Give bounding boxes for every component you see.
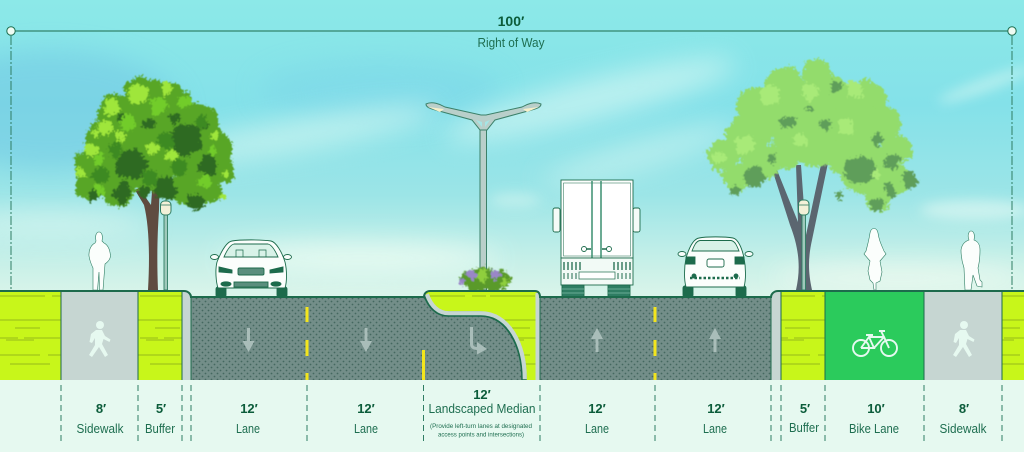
icon: left pedestrian [89,321,110,357]
label: lane 3: Lane [585,421,609,436]
footer label band [0,380,1024,452]
left sidewalk [61,291,138,380]
asphalt roadway [188,297,774,380]
cyclist silhouette [864,228,886,290]
icon: right pedestrian [953,321,974,357]
label: landscaped median: 12′ [473,387,491,402]
label: lane 4: Lane [703,421,727,436]
median curb edge [426,295,524,380]
yellow lane stripes [307,307,655,380]
label: lane 1: 12′ [240,401,258,416]
left curb [182,291,191,380]
right lamp post [798,200,809,290]
street cross-section [0,291,1024,380]
label: landscaped median: access points and intersections) [438,432,524,438]
left tree [74,77,235,290]
left car front view [210,240,292,297]
label: lane 3 [585,401,609,436]
right planting strip [1002,291,1024,380]
label: landscaped median: (Provide left-turn lanes at designated [430,423,533,430]
label: bike lane [849,401,899,436]
label: landscaped median: Landscaped Median [428,401,536,416]
label: right sidewalk: Sidewalk [940,421,987,436]
label: bike lane: 10′ [867,401,885,416]
label: lane 1 [236,401,260,436]
label: lane 2 [354,401,378,436]
icon: bicycle [853,331,897,356]
dimension value: 100′ [498,13,525,29]
label: left sidewalk: Sidewalk [76,421,124,436]
label: right buffer [789,401,820,435]
label: right sidewalk [940,401,987,436]
right pedestrian silhouette [961,231,982,290]
left buffer [138,291,182,380]
bike lane [825,291,924,380]
right sidewalk [924,291,1002,380]
right of way dimension line [7,13,1016,290]
label: landscaped median [428,387,536,438]
lane arrows [242,327,721,354]
label: lane 2: 12′ [357,401,375,416]
left planting strip [0,291,61,380]
sky background [0,0,1024,300]
median shrub [458,268,511,292]
right car rear view [678,237,753,297]
label: left sidewalk [76,401,124,436]
label: left buffer: 5′ [156,401,166,416]
label: bike lane: Bike Lane [849,421,899,436]
right buffer [781,291,825,380]
label: lane 3: 12′ [588,401,606,416]
label: right buffer: 5′ [800,401,810,416]
label: left buffer [145,401,176,436]
label: lane 2: Lane [354,421,378,436]
left pedestrian silhouette [89,232,110,290]
label: lane 4 [703,401,727,436]
label: left buffer: Buffer [145,421,176,436]
dimension label: Right of Way [478,35,545,50]
center street light [426,103,541,290]
label: left sidewalk: 8′ [96,401,106,416]
label: lane 1: Lane [236,421,260,436]
landscaped median [424,291,540,380]
label: right buffer: Buffer [789,420,820,435]
right tree [707,59,918,290]
label: right sidewalk: 8′ [959,401,969,416]
left lamp post [160,201,171,290]
rear truck [553,180,640,297]
right curb [771,291,781,380]
label: lane 4: 12′ [707,401,725,416]
